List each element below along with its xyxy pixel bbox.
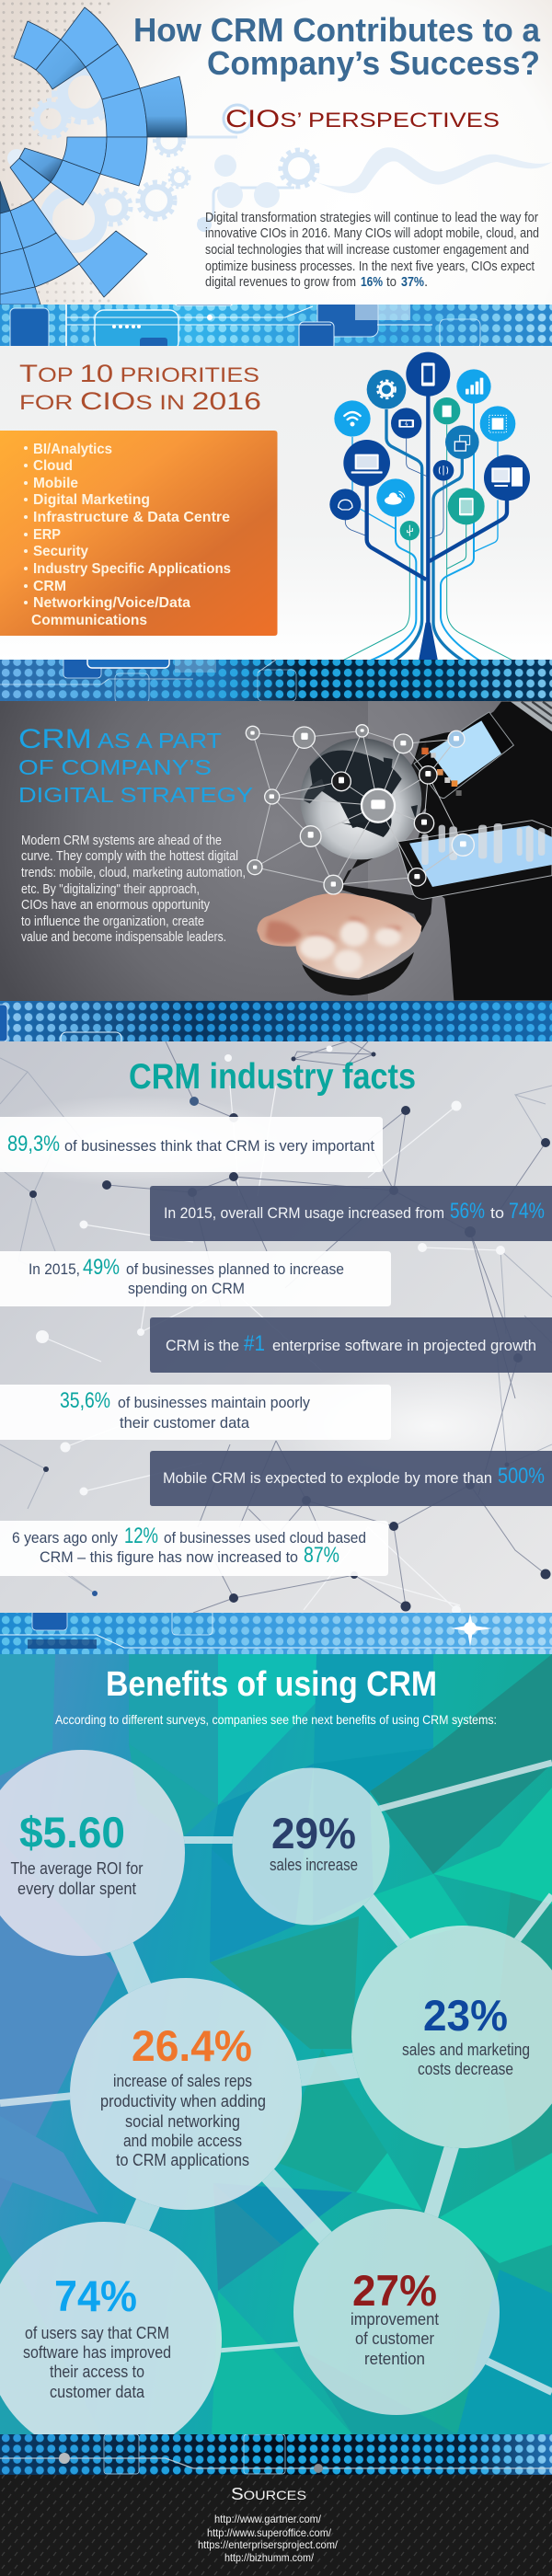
heading: CRM industry facts: CRM industry facts xyxy=(129,1057,416,1097)
fact card: #1 software: #1 xyxy=(244,1331,265,1356)
circle: 26.4% productivity: productivity when adding xyxy=(100,2092,266,2110)
circle: 27% retention xyxy=(293,2209,500,2415)
circle: 29% sales increase: sales increase xyxy=(270,1856,358,1874)
network background xyxy=(0,1041,552,1615)
intro paragraph: 16% xyxy=(361,274,383,290)
circle: $5.60 average ROI: The average ROI for xyxy=(11,1859,144,1878)
circle: 29% sales increase xyxy=(232,1768,390,1925)
icon: ring behind subtitle xyxy=(224,105,251,132)
circle: 27% retention: 27% xyxy=(352,2266,437,2315)
intro paragraph: digital revenues to grow from xyxy=(205,274,356,290)
wheel graphic xyxy=(0,7,187,305)
intro line: According to different surveys, companies see the next benefits of using CRM systems: xyxy=(55,1712,497,1727)
fact card: 49%: spending on CRM xyxy=(128,1280,245,1297)
source links: http://www.gartner.com/ xyxy=(214,2513,322,2525)
circle: 23% costs decrease xyxy=(351,1926,552,2148)
intro paragraph xyxy=(205,210,539,290)
circle: 27% retention: of customer xyxy=(355,2329,434,2348)
intro paragraph: to xyxy=(386,274,397,290)
panel: top 10 priorities xyxy=(0,346,552,661)
circle: 74% users: their access to xyxy=(50,2363,144,2381)
circle: 74% users: customer data xyxy=(50,2383,145,2401)
circle: 74% users: software has improved xyxy=(23,2343,171,2362)
intro paragraph: . xyxy=(424,274,428,290)
circle: 26.4% productivity: and mobile access xyxy=(123,2132,242,2150)
circle: 23% costs decrease: sales and marketing xyxy=(402,2041,530,2059)
icon: cloud xyxy=(385,491,405,505)
fact card: CRM usage: 56% xyxy=(450,1199,485,1224)
paragraph: modern CRM systems: Modern CRM systems are ahead of the xyxy=(21,833,222,848)
source links xyxy=(198,2513,339,2564)
icon: signal bars xyxy=(466,378,483,395)
orange list box: Networking/Voice/Data xyxy=(33,595,190,611)
decorative wave xyxy=(316,147,552,193)
fact card: cloud based CRM xyxy=(0,1521,388,1576)
circle: 74% users: of users say that CRM xyxy=(25,2324,169,2342)
orange list box: Industry Specific Applications xyxy=(33,561,231,577)
fact card: cloud based CRM: 87% xyxy=(304,1543,339,1568)
title: Company’s Success? xyxy=(207,44,540,82)
circuit band 2 xyxy=(0,660,552,701)
panel: CRM as part of digital strategy xyxy=(0,701,552,1001)
icon: gear xyxy=(377,381,396,398)
fact card: 35,6% xyxy=(0,1385,391,1440)
fact card: 35,6%: 35,6% xyxy=(60,1388,110,1413)
low-poly background xyxy=(0,1654,552,2434)
heading: CRM as a part of company's digital strategy: OF COMPANY’S xyxy=(18,755,212,779)
subtitle: CIO S’ PERSPECTIVES xyxy=(225,105,500,132)
fact card: 35,6%: their customer data xyxy=(120,1414,250,1432)
fact card: cloud based CRM: CRM – this figure has now increased to xyxy=(40,1548,298,1566)
icon: antenna xyxy=(439,466,448,476)
circuit band 3 xyxy=(0,1001,552,1045)
circle: 29% sales increase: 29% xyxy=(271,1809,356,1857)
icon: battery xyxy=(398,420,414,428)
fact card: #1 software: enterprise software in projected growth xyxy=(272,1337,536,1354)
fact card: #1 software xyxy=(150,1317,552,1373)
fact card: 49%: In 2015, xyxy=(29,1260,80,1278)
icon: phone xyxy=(421,362,435,386)
heading: sources: SOURCES xyxy=(231,2485,306,2503)
paragraph: modern CRM systems: to influence the organization, create xyxy=(21,914,204,929)
orange list box xyxy=(0,431,278,636)
paragraph: modern CRM systems: etc. By "digitalizing" their approach, xyxy=(21,881,200,897)
source links: http://www.superoffice.com/ xyxy=(207,2526,332,2539)
fact card: 89,3%: 89,3% xyxy=(7,1132,60,1156)
source links: https://enterprisersproject.com/ xyxy=(198,2538,339,2551)
icon: chip xyxy=(489,415,506,432)
circle: $5.60 average ROI xyxy=(0,1750,185,1956)
circle: 26.4% productivity: social networking xyxy=(125,2112,240,2131)
panel: benefits of using CRM xyxy=(0,1654,552,2457)
paragraph: modern CRM systems: value and become indispensable leaders. xyxy=(21,929,226,945)
fact card: CRM usage: to xyxy=(490,1204,504,1222)
heading: top 10 priorities xyxy=(19,360,261,415)
title xyxy=(133,11,541,82)
fact card: mobile CRM xyxy=(150,1451,552,1506)
circle: 26.4% productivity: increase of sales reps xyxy=(113,2072,252,2090)
fact card: 35,6%: of businesses maintain poorly xyxy=(118,1394,310,1411)
circle: 26.4% productivity: to CRM applications xyxy=(116,2151,249,2169)
fact card: cloud based CRM: 12% xyxy=(124,1524,158,1548)
icon: usb xyxy=(408,525,412,536)
icon: tablet xyxy=(459,498,474,515)
fact card: #1 software: CRM is the xyxy=(166,1337,239,1354)
fact card: CRM usage xyxy=(150,1186,552,1241)
icon: gauge xyxy=(339,500,352,510)
orange list box: Infrastructure & Data Centre xyxy=(33,510,230,525)
fact card: CRM usage: In 2015, overall CRM usage increased from xyxy=(164,1204,444,1222)
circle: 26.4% productivity: 26.4% xyxy=(132,2021,252,2070)
halftone dots and gears backdrop xyxy=(0,0,317,305)
fact card: 49% xyxy=(0,1251,391,1306)
heading: CRM as a part of company's digital strategy: DIGITAL STRATEGY xyxy=(18,783,253,807)
fact card: 49%: 49% xyxy=(83,1255,120,1280)
panel: CRM industry facts xyxy=(0,1041,552,1615)
icon: laptop xyxy=(351,454,383,474)
heading: top 10 priorities: FOR CIO S IN 2016 xyxy=(19,387,261,415)
orange list box: CRM xyxy=(33,579,66,594)
fact card: CRM usage: 74% xyxy=(509,1199,545,1224)
circle: 74% users: 74% xyxy=(54,2271,137,2320)
heading: CRM as a part of company's digital strategy: CRM AS A PART xyxy=(18,724,222,754)
heading: top 10 priorities: TOP 10 PRIORITIES xyxy=(19,360,259,387)
illustration: businessman with globe and devices xyxy=(246,702,552,1000)
icon: desktop xyxy=(491,467,523,487)
panel: sources xyxy=(0,2475,552,2576)
title: How CRM Contributes to a xyxy=(133,11,541,49)
paragraph: modern CRM systems: trends: mobile, cloud, marketing automation, xyxy=(21,865,246,880)
panel: intro background xyxy=(0,0,552,305)
circuit band 5 xyxy=(0,2434,552,2475)
intro paragraph: 37% xyxy=(401,274,424,290)
orange list box: Digital Marketing xyxy=(33,492,150,508)
orange list box: Mobile xyxy=(33,476,78,491)
orange list box: ERP xyxy=(33,527,61,543)
fact card: cloud based CRM: 6 years ago only xyxy=(12,1529,118,1547)
circle: 74% users xyxy=(0,2222,222,2457)
circuit band 4 xyxy=(0,1610,552,1654)
fact card: cloud based CRM: of businesses used cloud based xyxy=(164,1529,366,1547)
icon: wifi xyxy=(344,412,361,425)
fact card: mobile CRM: Mobile CRM is expected to explode by more than xyxy=(163,1469,492,1487)
icon: sd card xyxy=(443,406,452,417)
circle: 27% retention: improvement xyxy=(351,2310,439,2329)
paragraph: modern CRM systems: CIOs have an enormous opportunity xyxy=(21,897,210,913)
technology tree xyxy=(329,352,530,661)
fact card: 89,3% xyxy=(0,1117,383,1172)
source links: http://bizhumm.com/ xyxy=(224,2551,315,2564)
heading: CRM as a part of company's digital strategy xyxy=(18,724,253,807)
paragraph: modern CRM systems xyxy=(21,833,246,945)
circle: 27% retention: retention xyxy=(364,2350,425,2368)
heading: benefits of using CRM: Benefits of using CRM xyxy=(106,1665,437,1704)
circle: 23% costs decrease: 23% xyxy=(423,1991,508,2040)
icon: windows xyxy=(454,435,470,451)
connectors between benefit circles xyxy=(0,1763,552,2392)
orange list box: Communications xyxy=(31,613,147,628)
circle: 26.4% productivity xyxy=(70,1978,302,2210)
circle: $5.60 average ROI: $5.60 xyxy=(19,1808,125,1857)
paragraph: modern CRM systems: curve. They comply with the hottest digital xyxy=(21,848,238,864)
orange list box: Security xyxy=(33,544,88,559)
circle: $5.60 average ROI: every dollar spent xyxy=(17,1880,136,1898)
orange list box: BI/Analytics xyxy=(33,442,112,457)
circuit band 1 xyxy=(0,305,552,346)
circle: 23% costs decrease: costs decrease xyxy=(418,2060,513,2078)
orange list box: Cloud xyxy=(33,458,73,474)
fact card: 49%: of businesses planned to increase xyxy=(126,1260,344,1278)
fact card: 89,3%: of businesses think that CRM is very important xyxy=(64,1137,374,1155)
